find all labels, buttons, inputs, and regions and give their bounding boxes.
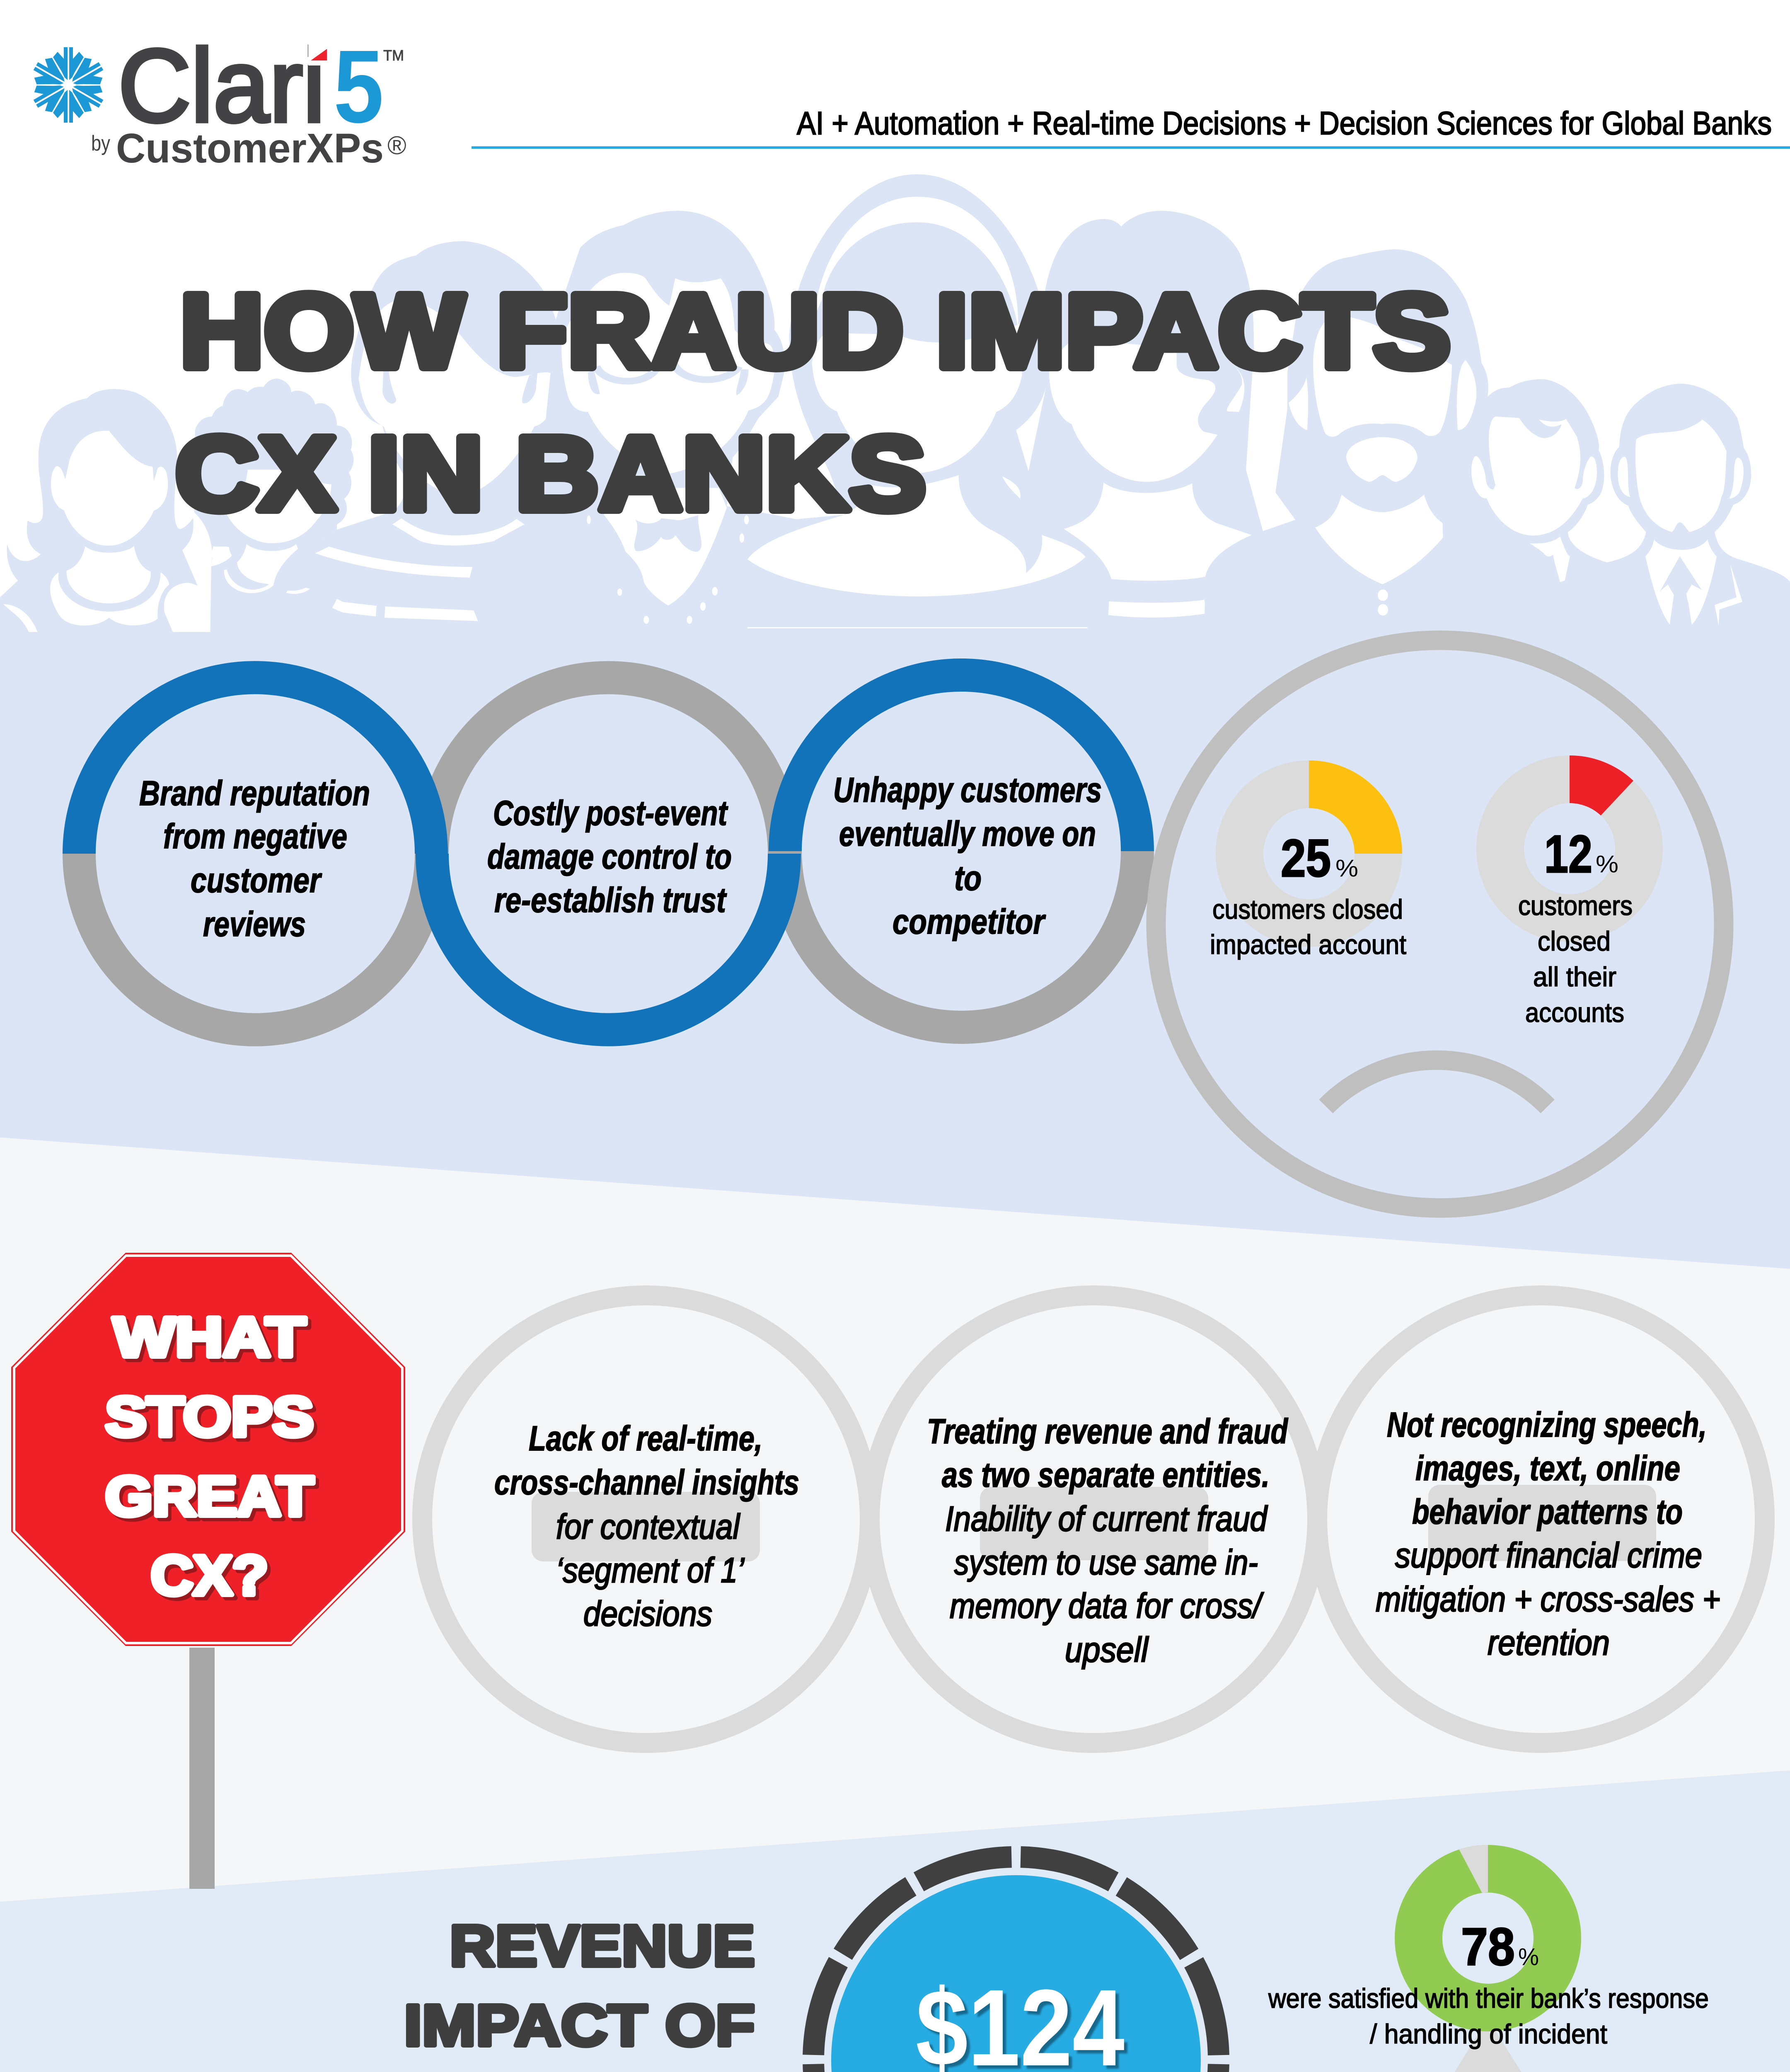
text: unhappy customers bbox=[833, 770, 1102, 941]
sign text bbox=[105, 1306, 314, 1607]
text: lack of real-time: for contextual bbox=[556, 1507, 740, 1546]
text: treating revenue and fraud: system to use same in- bbox=[954, 1543, 1258, 1582]
donut chart: 78 percent bbox=[1419, 1845, 1557, 2007]
stat: 25 percent: impacted account bbox=[1210, 929, 1406, 960]
section background: fraud impact band bbox=[0, 633, 1790, 1269]
heading: revenue impact: IMPACT OF bbox=[404, 1992, 755, 2058]
logo byline: by bbox=[91, 131, 110, 155]
ring: damage control upper half bbox=[432, 678, 784, 854]
icon: sad face bbox=[1156, 640, 1724, 1208]
logo accent triangle bbox=[311, 49, 327, 61]
text: costly post-event: re-establish trust bbox=[494, 881, 727, 920]
text: unhappy customers: eventually move on bbox=[839, 814, 1096, 853]
text: brand reputation: reviews bbox=[203, 905, 306, 944]
crowd illustration of customers bbox=[0, 174, 1790, 642]
text: lack of real-time bbox=[494, 1419, 799, 1633]
text: brand reputation: Brand reputation bbox=[139, 774, 370, 813]
badge: 124 million bbox=[813, 1857, 1219, 2072]
text: not recognizing speech: mitigation + cross-sales + bbox=[1376, 1580, 1720, 1619]
stat: 25 percent: % bbox=[1335, 855, 1358, 882]
logo wordmark: Clari bbox=[118, 28, 325, 143]
sign text: CX? bbox=[151, 1544, 268, 1607]
text: unhappy customers: to bbox=[954, 859, 982, 898]
donut chart: 25 percent bbox=[1240, 784, 1378, 923]
ring: unhappy customers upper half bbox=[785, 675, 1137, 851]
panel: unrecognized signals ring bbox=[1317, 1295, 1765, 1743]
logo: Clari5 by CustomerXPs bbox=[28, 28, 406, 172]
text: treating revenue and fraud: as two separate entities. bbox=[942, 1455, 1270, 1494]
stat: 12 percent bbox=[1518, 825, 1633, 1028]
ring: brand reputation upper half bbox=[79, 678, 431, 854]
title: CX IN BANKS bbox=[175, 415, 926, 532]
text: unhappy customers: Unhappy customers bbox=[833, 770, 1102, 809]
stat: 78 percent bbox=[1268, 1917, 1709, 2049]
text: treating revenue and fraud: upsell bbox=[1065, 1630, 1149, 1669]
stat: 25 percent: customers closed bbox=[1212, 894, 1403, 925]
section background: what stops great CX band bbox=[0, 1138, 1790, 1902]
text: not recognizing speech: behavior patterns to bbox=[1412, 1492, 1683, 1531]
stat: 25 percent: 25 bbox=[1281, 829, 1331, 888]
frown bbox=[1326, 1060, 1548, 1106]
sign text: WHAT bbox=[113, 1306, 306, 1368]
sign text: STOPS bbox=[105, 1385, 314, 1448]
text: costly post-event bbox=[487, 794, 732, 920]
section background: revenue impact band bbox=[0, 1770, 1790, 2072]
stat: 12 percent: all their bbox=[1533, 961, 1616, 992]
stop sign bbox=[11, 1253, 405, 1646]
connector triangle bbox=[1415, 2018, 1562, 2072]
ring: unhappy customers lower half bbox=[785, 851, 1137, 1027]
stat: 78 percent: were satisfied with their bank’s response bbox=[1268, 1983, 1709, 2014]
panel: separate entities ring bbox=[870, 1295, 1317, 1743]
stat: 12 percent: customers bbox=[1518, 890, 1633, 921]
text: treating revenue and fraud: memory data for cross/ bbox=[950, 1586, 1264, 1625]
text: brand reputation: customer bbox=[191, 861, 322, 900]
text: not recognizing speech: retention bbox=[1488, 1623, 1610, 1662]
stat: 25 percent bbox=[1210, 829, 1406, 960]
heading: revenue impact: REVENUE bbox=[450, 1913, 755, 1978]
post of stop sign bbox=[189, 1648, 215, 1889]
stat: 78 percent: 78 bbox=[1461, 1917, 1515, 1977]
text: not recognizing speech bbox=[1376, 1405, 1720, 1662]
text: lack of real-time: Lack of real-time, bbox=[529, 1419, 762, 1458]
ring: damage control lower half bbox=[432, 854, 784, 1030]
title: HOW FRAUD IMPACTS bbox=[180, 272, 1451, 390]
text: treating revenue and fraud: Treating revenue and fraud bbox=[927, 1412, 1288, 1451]
text: treating revenue and fraud: Inability of current fraud bbox=[945, 1499, 1268, 1538]
title bbox=[175, 272, 1451, 532]
trademark: TM bbox=[383, 47, 404, 64]
text: unhappy customers: competitor bbox=[893, 902, 1046, 941]
text: lack of real-time: ‘segment of 1’ bbox=[556, 1551, 745, 1590]
heading: revenue impact bbox=[268, 1913, 757, 2072]
donut chart: 12 percent bbox=[1500, 779, 1639, 918]
stat: 12 percent: closed bbox=[1538, 926, 1611, 956]
stat: 78 percent: / handling of incident bbox=[1370, 2019, 1607, 2049]
stat: 12 percent: 12 bbox=[1544, 825, 1592, 884]
panel: real-time insight ring bbox=[422, 1295, 870, 1743]
text: not recognizing speech: images, text, online bbox=[1415, 1449, 1680, 1488]
panel: fraud consequences rings bbox=[79, 675, 1137, 1030]
text: brand reputation: from negative bbox=[163, 817, 347, 856]
ring: brand reputation lower half bbox=[79, 854, 431, 1030]
text: costly post-event: damage control to bbox=[487, 837, 732, 876]
stat: 78 percent: % bbox=[1518, 1944, 1539, 1970]
stat: 12 percent: accounts bbox=[1525, 997, 1624, 1028]
text: lack of real-time: cross-channel insights bbox=[494, 1463, 799, 1502]
logo numeral 5: 5 bbox=[334, 29, 384, 144]
text: brand reputation bbox=[139, 774, 370, 944]
header rule bbox=[472, 146, 1790, 149]
icon: snowflake bbox=[28, 47, 109, 123]
logo CustomerXPs: CustomerXPs bbox=[116, 125, 384, 172]
text: treating revenue and fraud bbox=[927, 1412, 1288, 1669]
text: not recognizing speech: support financial crime bbox=[1395, 1536, 1702, 1575]
sign text: GREAT bbox=[105, 1465, 314, 1527]
text: not recognizing speech: Not recognizing speech, bbox=[1387, 1405, 1707, 1444]
registered mark: ® bbox=[387, 131, 406, 160]
text: lack of real-time: decisions bbox=[583, 1594, 712, 1633]
stat: 12 percent: % bbox=[1596, 851, 1618, 878]
text: costly post-event: Costly post-event bbox=[493, 794, 728, 833]
